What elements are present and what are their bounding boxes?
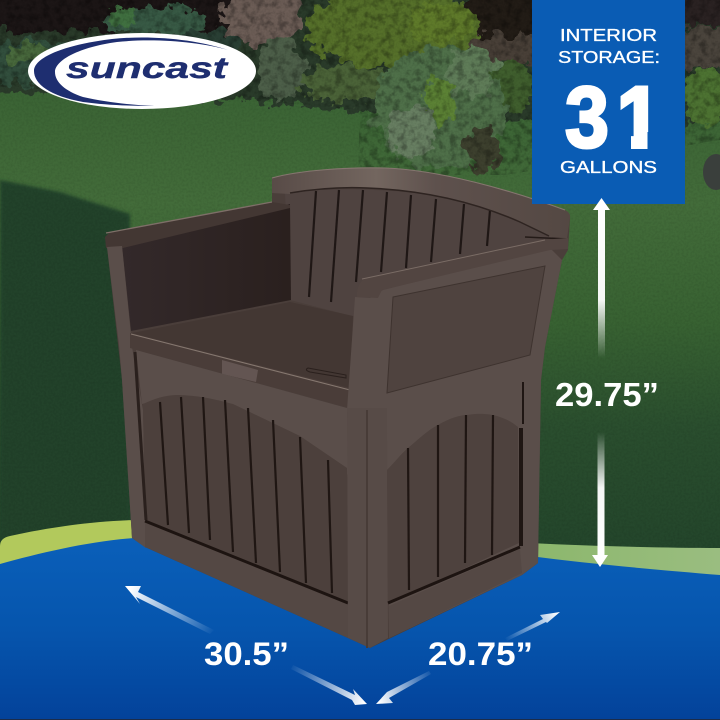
left inner seam <box>135 352 146 520</box>
arrow: depth right <box>505 612 560 641</box>
lid handle recess <box>306 368 346 378</box>
recessed arm panel <box>387 266 545 393</box>
logo oval <box>28 33 256 109</box>
left arm inner panel <box>122 204 291 331</box>
width label: 30.5” <box>204 636 289 672</box>
seat lid front lip <box>130 333 351 408</box>
garden background <box>0 0 720 548</box>
back slats <box>309 190 490 302</box>
arrow: height down <box>592 432 608 567</box>
floor: blue base <box>0 538 720 720</box>
corner post <box>347 408 388 648</box>
callout label <box>558 25 660 67</box>
callout panel <box>532 0 685 204</box>
right arm top rail <box>357 238 568 298</box>
back top rail <box>272 168 570 238</box>
logo swoosh <box>34 37 228 106</box>
arrow: width right <box>291 665 367 705</box>
right base board <box>389 549 522 638</box>
callout value: 3 <box>565 70 609 166</box>
logo wordmark: suncast <box>66 52 230 85</box>
arrow: depth left <box>376 671 431 704</box>
right lower panel <box>387 414 519 604</box>
rail slit <box>525 237 566 239</box>
front lower panel <box>143 395 348 602</box>
storage seat product <box>105 168 570 648</box>
foliage <box>0 0 720 172</box>
left arm top rail <box>105 202 290 248</box>
floor: green accent strip left <box>0 520 135 565</box>
right slats <box>408 382 523 590</box>
logo: suncast <box>28 33 256 109</box>
callout value <box>565 70 666 166</box>
foliage mottling <box>0 0 720 180</box>
back panel <box>285 189 552 316</box>
shaded lawn <box>0 180 130 565</box>
callout unit: GALLONS <box>560 157 657 177</box>
seat lid <box>132 302 353 390</box>
bottom edge <box>0 719 720 720</box>
arrow: height up <box>593 198 610 359</box>
boulder <box>703 154 720 190</box>
left outer front post <box>107 246 146 548</box>
floor: green accent strip right <box>530 543 720 590</box>
front slats <box>160 397 332 593</box>
depth label: 20.75” <box>428 636 533 672</box>
height label: 29.75” <box>555 376 659 413</box>
front base board <box>145 522 348 638</box>
arrow: width left <box>125 586 214 634</box>
callout: interior storage <box>532 0 685 204</box>
lawn grain <box>0 85 720 565</box>
callout label: INTERIOR <box>560 25 657 45</box>
right side upper body <box>347 248 562 638</box>
callout label: STORAGE: <box>558 47 660 67</box>
silhouette <box>105 168 570 648</box>
callout value: 1 <box>617 70 661 166</box>
front upper band <box>136 350 348 475</box>
